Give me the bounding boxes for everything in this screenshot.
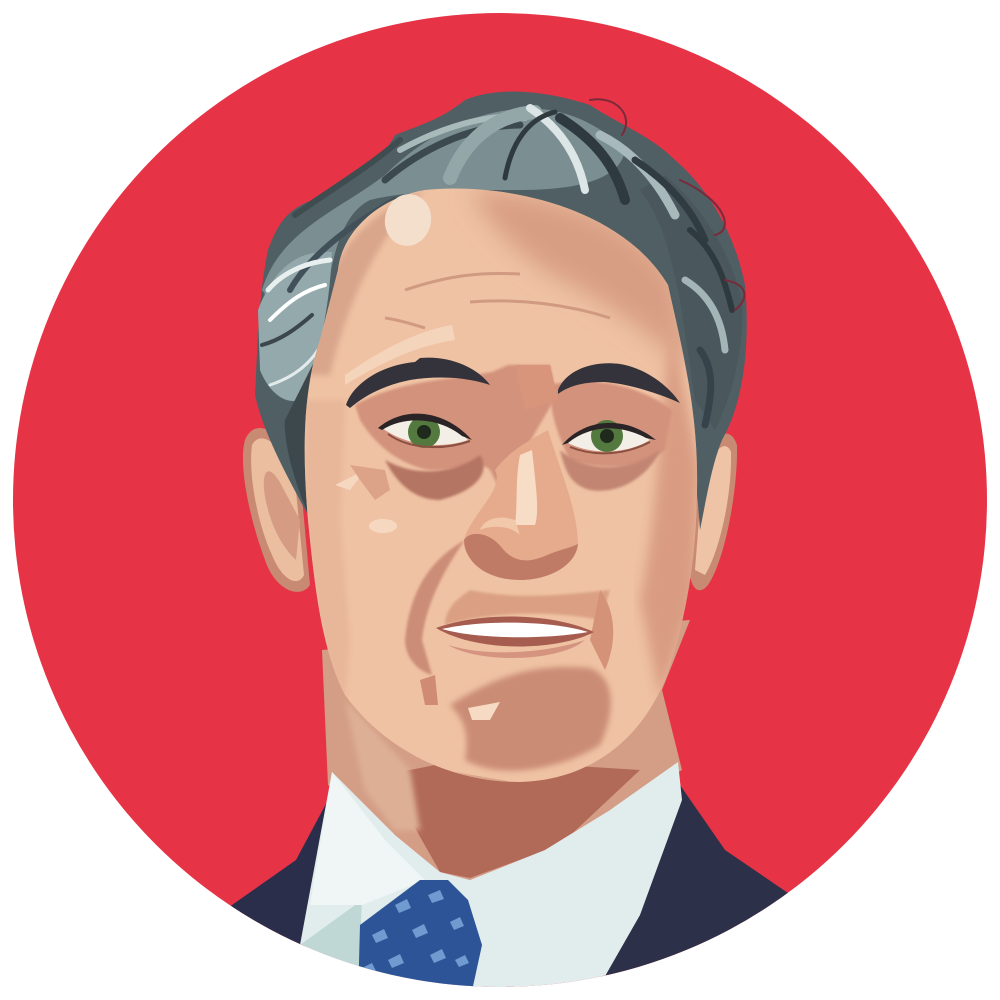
mouth xyxy=(436,616,594,658)
navy suit jacket xyxy=(231,786,788,977)
right eye xyxy=(562,420,656,453)
figure clipped to circle xyxy=(231,620,788,987)
left eye xyxy=(378,414,472,448)
forehead highlight xyxy=(380,190,436,250)
forehead lines xyxy=(385,273,610,328)
patterned blue tie xyxy=(358,880,482,986)
clipped face shading xyxy=(305,190,700,790)
chin highlight xyxy=(468,702,500,720)
forehead crease highlight xyxy=(345,325,455,385)
cheek marks xyxy=(369,519,397,533)
right ear xyxy=(690,434,737,590)
brow and eye shadows xyxy=(355,365,556,500)
face shape xyxy=(305,189,700,790)
left ear xyxy=(243,428,310,592)
nasolabial and cheek shadow xyxy=(405,540,465,675)
hair strands xyxy=(262,99,744,425)
neck xyxy=(322,620,690,880)
nose xyxy=(464,430,578,580)
eyebrows xyxy=(346,358,490,408)
white shirt collar xyxy=(300,762,682,990)
hair back mass xyxy=(255,92,747,530)
